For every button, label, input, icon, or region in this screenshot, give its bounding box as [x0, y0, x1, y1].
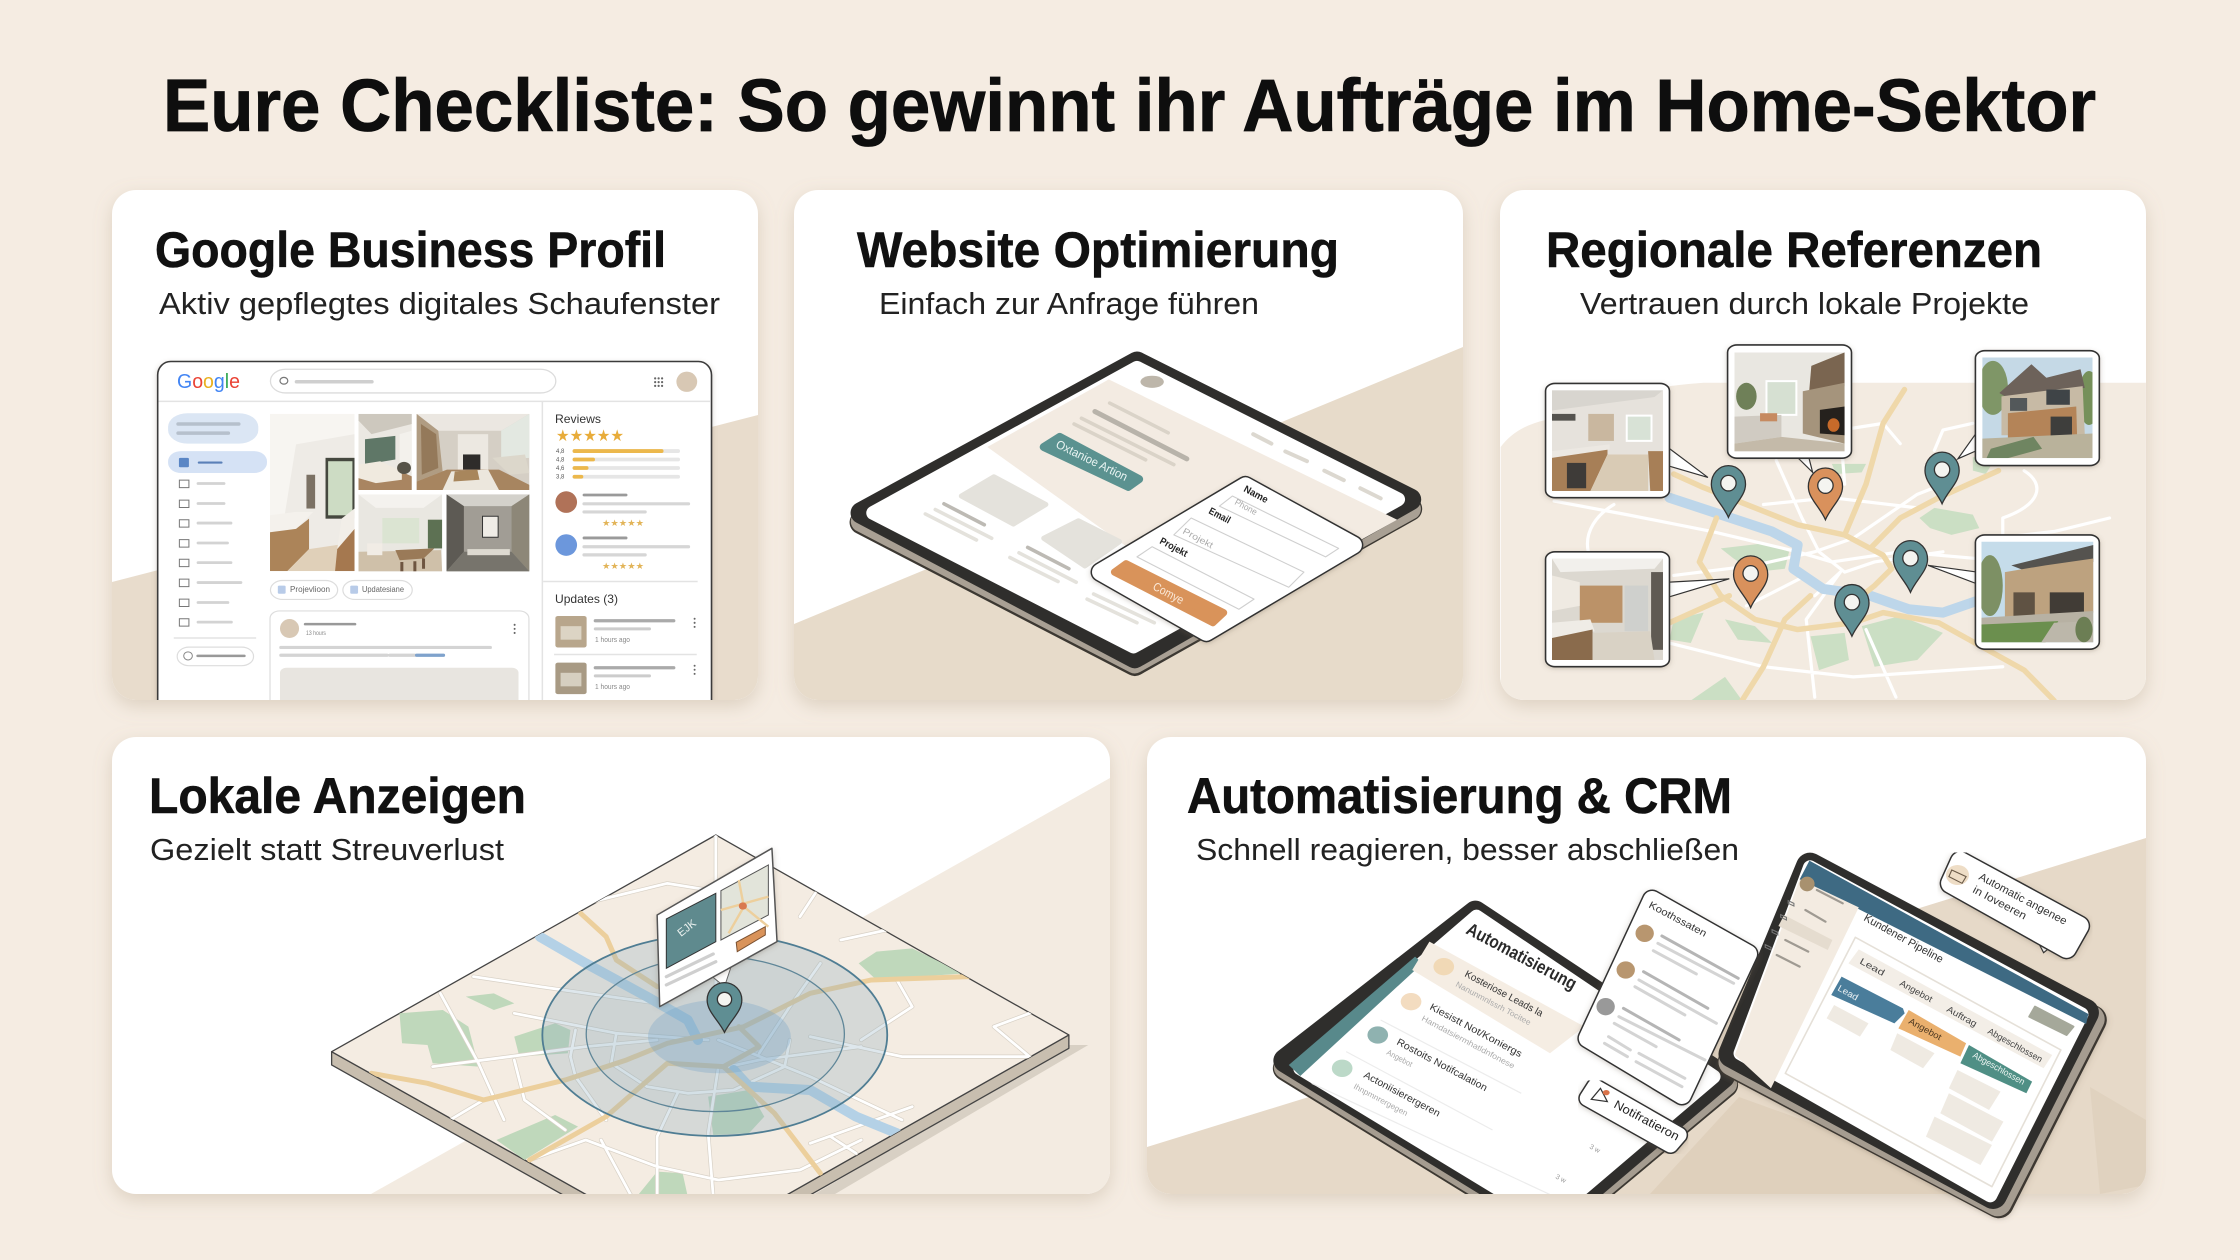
panel: Automatisierung & CRM: Abgeschlossen: [1986, 1026, 2044, 1064]
panel: Website Optimierung: Projekt: [1181, 526, 1215, 551]
panel: Automatisierung & CRM: Koothssaten: [1647, 900, 1708, 940]
panel: Website Optimierung: Projekt: [1158, 536, 1190, 560]
map pin: [707, 983, 742, 1032]
isometric map with target radius: EJK: [675, 917, 699, 939]
photo: living room green wall: [358, 414, 412, 490]
panel: Website Optimierung: Name: [1242, 484, 1270, 506]
browser mockup: ★★★★★: [602, 561, 644, 571]
right tablet: pipeline: [1732, 861, 2092, 1203]
callout: fireplace living room: [1728, 345, 1851, 458]
panel: Automatisierung & CRM: 3 w: [1588, 1144, 1602, 1155]
callout: modern kitchen: [1546, 552, 1669, 667]
updates heading: Updates (3): [555, 592, 618, 606]
panel: Automatisierung & CRM: Actoniisierergeren: [1362, 1070, 1442, 1120]
heading: Automatisierung & CRM: [1187, 768, 1732, 824]
panel: Automatisierung & CRM: Kosteriose Leads la: [1463, 969, 1545, 1020]
ad card: [657, 848, 777, 1007]
panel: Regionale Referenzen: [1500, 190, 2146, 701]
left tablet: automation list: [1285, 913, 1726, 1232]
photo: dining room: [358, 494, 442, 572]
panel: Website Optimierung: Oxtanioe Artion: [1054, 437, 1130, 484]
panel: Automatisierung & CRM: Angebot: [1385, 1048, 1415, 1069]
photo: kitchen: [270, 414, 354, 572]
tablet mockup: [862, 363, 1410, 664]
panel: Website Optimierung: Phone: [1233, 497, 1259, 517]
panel: Automatisierung & CRM: Auftrag: [1945, 1004, 1979, 1029]
pins: [1711, 452, 1959, 636]
panel: Website Optimierung: [794, 190, 1463, 700]
browser mockup: 4,6: [556, 466, 565, 472]
browser mockup: 1 hours ago: [595, 682, 630, 691]
pipeline stages: [1831, 977, 1905, 1023]
subheading: Aktiv gepflegtes digitales Schaufenster: [159, 286, 720, 321]
panel: Automatisierung & CRM: Kiesistt Not/Koniergs: [1428, 1002, 1524, 1060]
panel: Website Optimierung: Email: [1207, 506, 1232, 527]
title: Eure Checkliste: So gewinnt ihr Aufträge im Home-Sektor: [163, 64, 2096, 147]
subheading: Schnell reagieren, besser abschließen: [1196, 832, 1739, 867]
review stars: ★★★★★: [556, 428, 624, 445]
panel: Automatisierung & CRM: Hamdatsiermhatldnfonese: [1420, 1014, 1517, 1071]
panel: Website Optimierung: Comye: [1151, 579, 1187, 607]
form card: [1101, 486, 1353, 632]
callout: brick house: [1975, 535, 2099, 649]
reviews heading: Reviews: [555, 412, 601, 426]
panel: Automatisierung & CRM: [1147, 737, 2146, 1232]
rating bars: [574, 451, 678, 477]
heading: Google Business Profil: [155, 222, 666, 278]
callout: kitchen: [1546, 383, 1669, 498]
call-to-action button: [1044, 437, 1139, 487]
Google logo: Google: [177, 371, 240, 393]
panel: Lokale Anzeigen: [112, 737, 1110, 1260]
heading: Lokale Anzeigen: [149, 768, 526, 824]
panel: Automatisierung & CRM: Ihnpmnrergegen: [1352, 1082, 1409, 1118]
panel: Automatisierung & CRM: in Ioveeren: [1971, 884, 2028, 922]
target rings: [542, 934, 887, 1136]
browser mockup: 3,8: [556, 474, 565, 480]
panel: Automatisierung & CRM: Angebot: [1898, 978, 1935, 1004]
panel: Google Business Profil: [112, 190, 758, 733]
subheading: Einfach zur Anfrage führen: [879, 286, 1259, 321]
subheading: Gezielt statt Streuverlust: [150, 832, 504, 867]
panel: Automatisierung & CRM: Lead: [1858, 956, 1886, 978]
panel: Automatisierung & CRM: Rostoits Notifcalation: [1395, 1037, 1489, 1094]
panel: Automatisierung & CRM: Lead: [1836, 983, 1860, 1002]
panel: Automatisierung & CRM: Notifratieron: [1612, 1097, 1682, 1143]
notification chip: [1587, 1087, 1679, 1145]
floating contact card: [1588, 900, 1748, 1095]
callout: house: [1975, 351, 2100, 466]
city map with project callouts: [1501, 345, 2146, 701]
panel: Automatisierung & CRM: Kundener Pipeline: [1862, 912, 1945, 966]
chip label: Projevlioon: [290, 585, 330, 594]
heading: Website Optimierung: [857, 222, 1339, 278]
browser mockup: Updatesiane: [362, 585, 405, 594]
email speech bubble: [1946, 862, 2079, 953]
isometric map with target radius: [331, 834, 1088, 1194]
panel: Automatisierung & CRM: Abgeschlossen: [1971, 1050, 2027, 1087]
photo: grey room: [446, 494, 530, 572]
panel: Automatisierung & CRM: Nanunmnlssrh Tocitee: [1454, 980, 1533, 1027]
heading: Regionale Referenzen: [1546, 222, 2042, 278]
browser mockup: ★★★★★: [602, 518, 644, 528]
browser mockup: 4,8: [556, 458, 565, 464]
browser mockup: 4,8: [556, 449, 565, 455]
panel: Automatisierung & CRM: Automatic angenee: [1977, 871, 2069, 928]
panel: Automatisierung & CRM: Angebot: [1907, 1016, 1944, 1042]
photo: living room fireplace: [416, 414, 530, 490]
browser mockup: 1 hours ago: [595, 635, 630, 644]
callout tails: [1667, 447, 1708, 477]
browser mockup: [158, 362, 712, 733]
browser mockup: 13 hours: [306, 631, 326, 637]
subheading: Vertrauen durch lokale Projekte: [1580, 286, 2029, 321]
panel: Automatisierung & CRM: 3 w: [1554, 1174, 1568, 1185]
panel: Automatisierung & CRM: Automatisierung: [1463, 919, 1580, 994]
